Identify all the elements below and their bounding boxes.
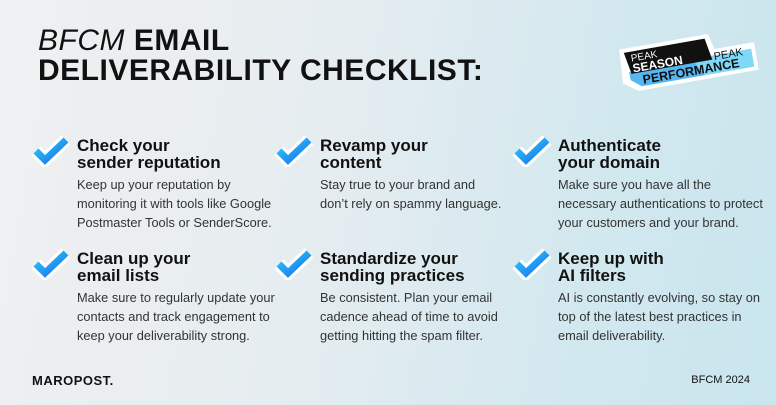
item: revamp content bbox=[274, 136, 501, 211]
item: standardize sending: Standardize your bbox=[320, 249, 458, 268]
item: revamp content: Stay true to your brand and bbox=[320, 177, 475, 192]
logo: MAROPOST. bbox=[32, 373, 114, 388]
title bbox=[38, 24, 483, 87]
item: sender reputation bbox=[32, 136, 272, 230]
item: revamp content: content bbox=[320, 153, 381, 172]
item: sender reputation: Keep up your reputation by bbox=[77, 177, 231, 192]
item: clean email lists: keep your deliverability strong. bbox=[77, 328, 250, 343]
item: clean email lists: Make sure to regularly update your bbox=[77, 290, 275, 305]
badge: peak season peak performance: SEASON bbox=[631, 53, 684, 75]
item: clean email lists: contacts and track engagement to bbox=[77, 309, 270, 324]
item: authenticate domain: your domain bbox=[558, 153, 660, 172]
item: AI filters: Keep up with bbox=[558, 249, 664, 268]
title: BFCM EMAIL bbox=[38, 24, 230, 57]
item: revamp content: Revamp your bbox=[320, 136, 428, 155]
item: revamp content: don’t rely on spammy language. bbox=[320, 196, 501, 211]
item: authenticate domain: Make sure you have all the bbox=[558, 177, 711, 192]
item: standardize sending: cadence ahead of time to avoid bbox=[320, 309, 498, 324]
title: DELIVERABILITY CHECKLIST: bbox=[38, 54, 483, 87]
item: clean email lists: email lists bbox=[77, 266, 159, 285]
badge: peak season peak performance: PEAK bbox=[630, 49, 659, 65]
icon: check bbox=[32, 136, 70, 167]
item: sender reputation: Postmaster Tools or SenderScore. bbox=[77, 215, 272, 230]
item: AI filters: AI is constantly evolving, so stay on bbox=[558, 290, 760, 305]
item: clean email lists bbox=[32, 248, 275, 343]
item: standardize sending: Be consistent. Plan your email bbox=[320, 290, 492, 305]
item: AI filters: AI filters bbox=[558, 266, 626, 285]
item: authenticate domain: your customers and your brand. bbox=[558, 215, 739, 230]
item: sender reputation: sender reputation bbox=[77, 153, 221, 172]
item: standardize sending: getting hitting the spam filter. bbox=[320, 328, 483, 343]
item: standardize sending bbox=[274, 248, 498, 343]
item: authenticate domain: necessary authentications to protect bbox=[558, 196, 763, 211]
item: authenticate domain bbox=[512, 136, 763, 230]
item: sender reputation: monitoring it with tools like Google bbox=[77, 196, 271, 211]
badge: peak season peak performance bbox=[619, 34, 759, 91]
item: sender reputation: Check your bbox=[77, 136, 170, 155]
footer year: BFCM 2024 bbox=[691, 374, 750, 386]
badge: peak season peak performance: PERFORMANCE bbox=[642, 56, 740, 87]
badge: peak season peak performance: PEAK bbox=[713, 46, 745, 63]
item: authenticate domain: Authenticate bbox=[558, 136, 661, 155]
item: AI filters: top of the latest best practices in bbox=[558, 309, 742, 324]
item: AI filters bbox=[512, 248, 760, 343]
item: AI filters: email deliverability. bbox=[558, 328, 665, 343]
item: standardize sending: sending practices bbox=[320, 266, 465, 285]
item: clean email lists: Clean up your bbox=[77, 249, 190, 268]
